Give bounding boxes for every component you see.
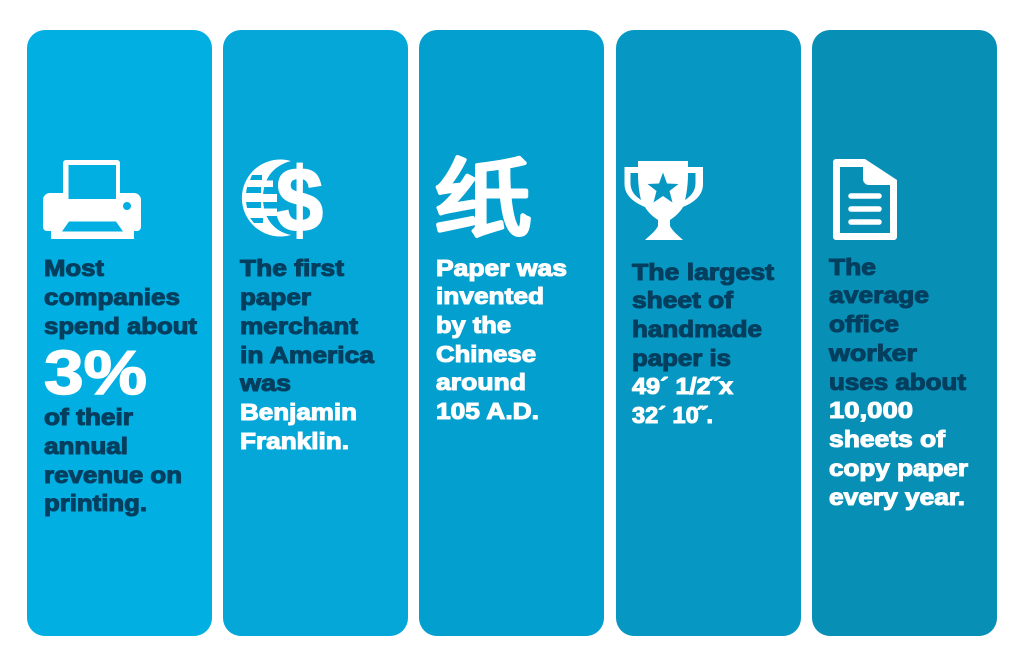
text: 10,000 sheets of copy paper every year: 10,000 bbox=[829, 397, 913, 423]
text: the largest sheet of handmade paper is: The largest bbox=[632, 259, 774, 285]
text: Benjamin Franklin: Franklin. bbox=[240, 428, 349, 454]
panel: office worker usage bbox=[812, 30, 997, 636]
icon: document bbox=[833, 159, 897, 240]
text: the average office worker uses about: average bbox=[829, 282, 929, 308]
icon: Chinese character for paper: 纸 bbox=[434, 131, 532, 254]
text: sheet dimensions: 49´ 1/2˝x bbox=[632, 373, 733, 399]
text: the largest sheet of handmade paper is: handmade bbox=[632, 316, 762, 342]
text: paper was invented by the Chinese around 105 A.D.: Paper was bbox=[436, 255, 567, 281]
text: of their annual revenue on printing bbox=[44, 404, 182, 516]
text: the first paper merchant in America was: in America bbox=[240, 342, 375, 368]
text: paper was invented by the Chinese around 105 A.D.: 105 A.D. bbox=[436, 398, 539, 424]
text: 10,000 sheets of copy paper every year: copy paper bbox=[829, 455, 968, 481]
text: Benjamin Franklin: Benjamin bbox=[240, 399, 357, 425]
text: the largest sheet of handmade paper is: paper is bbox=[632, 345, 731, 371]
text: the average office worker uses about: office bbox=[829, 311, 899, 337]
text: of their annual revenue on printing: printing. bbox=[44, 490, 147, 516]
text: the average office worker uses about: The bbox=[829, 254, 876, 280]
text: the first paper merchant in America was: was bbox=[239, 370, 291, 396]
icon: globe and dollar: $ bbox=[276, 150, 323, 251]
text: the average office worker uses about bbox=[828, 254, 966, 395]
panel: largest sheet bbox=[616, 30, 801, 636]
icon: globe and dollar bbox=[242, 150, 323, 251]
text: 10,000 sheets of copy paper every year bbox=[829, 397, 968, 510]
icon: trophy bbox=[624, 161, 703, 240]
text: sheet dimensions bbox=[632, 373, 733, 428]
text: the average office worker uses about: uses about bbox=[829, 369, 966, 395]
panel: printing cost bbox=[27, 30, 212, 636]
text: most companies spend about: spend about bbox=[44, 313, 197, 339]
text: the largest sheet of handmade paper is bbox=[632, 259, 774, 371]
text: the first paper merchant in America was bbox=[239, 255, 375, 396]
text: the first paper merchant in America was: The first bbox=[240, 255, 344, 281]
text: Benjamin Franklin bbox=[240, 399, 357, 454]
text: most companies spend about: Most bbox=[44, 255, 104, 281]
text: paper was invented by the Chinese around 105 A.D.: Chinese bbox=[436, 341, 536, 367]
text: of their annual revenue on printing: of their bbox=[44, 404, 133, 430]
text: paper was invented by the Chinese around 105 A.D.: invented bbox=[436, 283, 544, 309]
text: most companies spend about bbox=[44, 255, 197, 339]
text: paper was invented by the Chinese around 105 A.D.: by the bbox=[436, 312, 511, 338]
icon: printer bbox=[43, 160, 141, 239]
text: paper was invented by the Chinese around 105 A.D.: around bbox=[436, 369, 526, 395]
text: the average office worker uses about: worker bbox=[828, 340, 917, 366]
text: of their annual revenue on printing: annual bbox=[44, 433, 128, 459]
stat: 3%: 3% bbox=[44, 339, 147, 408]
text: the largest sheet of handmade paper is: sheet of bbox=[632, 287, 733, 313]
text: most companies spend about: companies bbox=[44, 284, 180, 310]
text: 10,000 sheets of copy paper every year: every year. bbox=[829, 484, 965, 510]
panel: paper invented bbox=[419, 30, 604, 636]
panel: first paper merchant bbox=[223, 30, 408, 636]
text: paper was invented by the Chinese around 105 A.D. bbox=[436, 255, 567, 424]
text: sheet dimensions: 32´ 10˝. bbox=[632, 402, 713, 428]
text: of their annual revenue on printing: revenue on bbox=[44, 462, 182, 488]
text: 10,000 sheets of copy paper every year: sheets of bbox=[829, 426, 945, 452]
text: the first paper merchant in America was: paper bbox=[240, 284, 311, 310]
text: the first paper merchant in America was: merchant bbox=[240, 313, 358, 339]
